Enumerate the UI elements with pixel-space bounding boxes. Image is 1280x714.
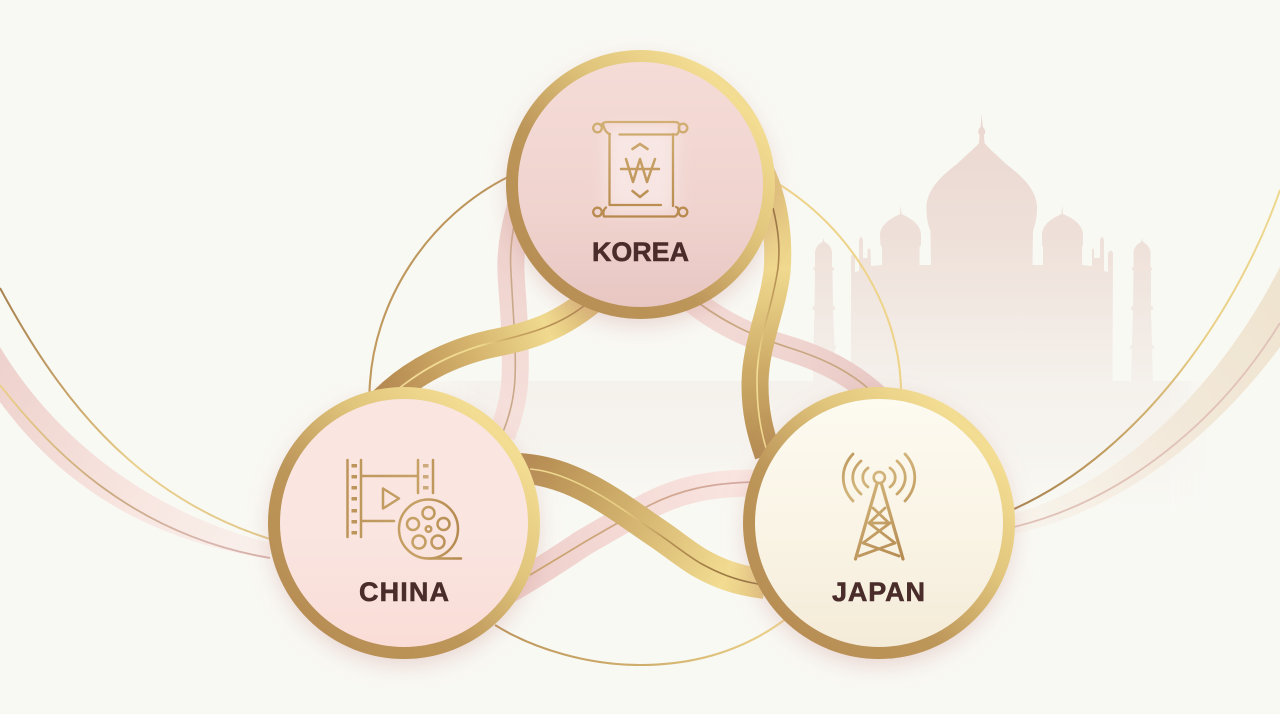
pink ribbon: Korea to China [502,180,530,435]
Korea disc [512,56,769,313]
gold ribbon: China to Japan [518,468,765,584]
icon: broadcast tower [843,454,915,559]
icon: scroll with won sign [593,122,687,216]
gold ribbon: Korea to Japan [755,170,779,455]
pink ribbon: Korea to Japan [680,290,878,398]
label: Korea: KOREA [592,237,689,267]
Japan disc [749,393,1009,653]
ground haze under monument [423,381,1208,511]
monument silhouette [812,114,1154,381]
label: Japan: JAPAN [832,577,925,607]
right sweeping band [1014,190,1280,534]
node: China [274,393,534,653]
left sweeping band [0,288,270,559]
left thin gold arc [0,288,270,539]
large thin connecting ring [370,176,901,665]
node: Korea [512,56,769,313]
pink ribbon: China to Japan [505,482,755,592]
China disc [274,393,534,653]
node: Japan [749,393,1009,653]
icon: film strip and reel [348,460,461,558]
label: China: CHINA [359,577,449,607]
gold ribbon: China to Korea [378,293,600,406]
right thin gold arc [1014,190,1280,509]
